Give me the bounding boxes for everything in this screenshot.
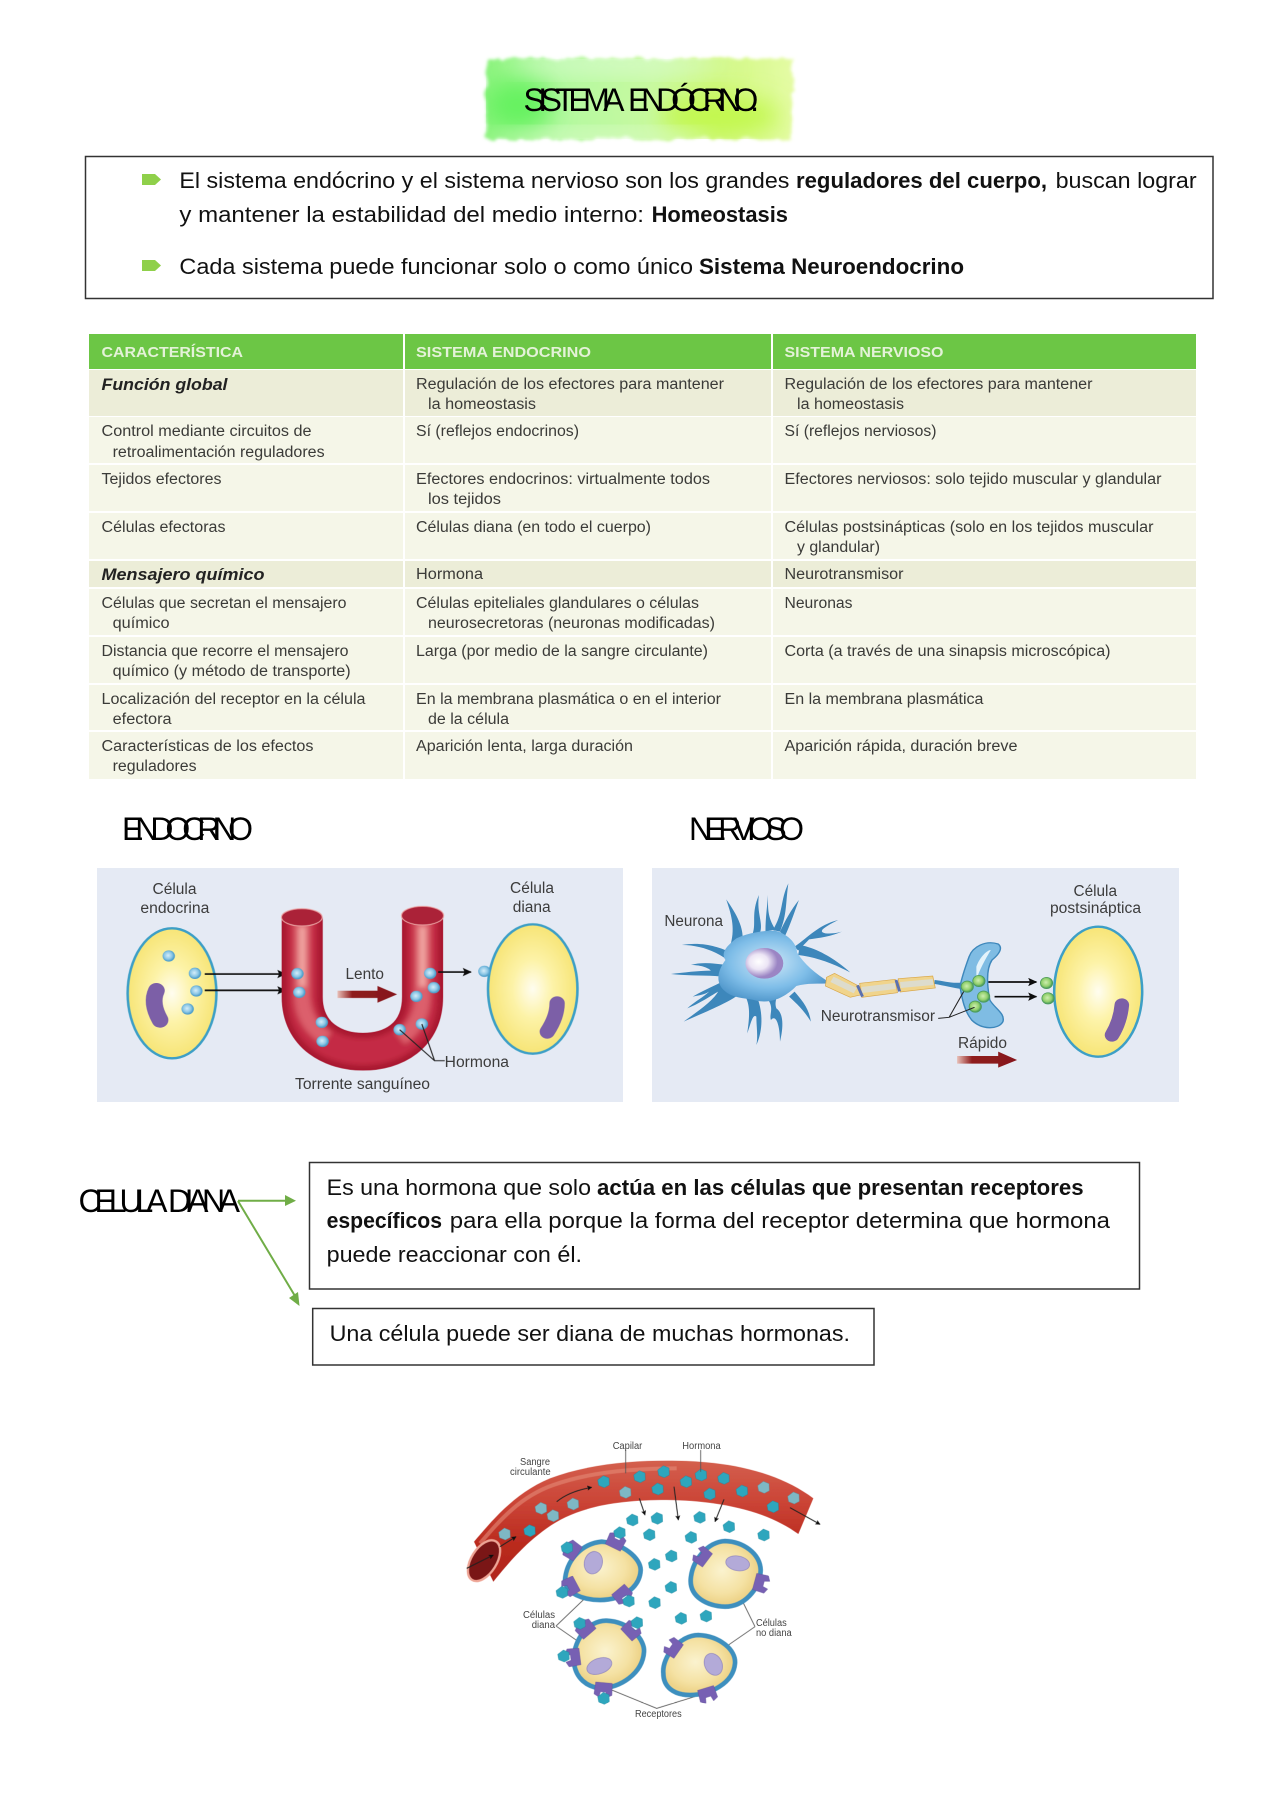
row: función global: [89, 370, 1196, 416]
row: características: Aparición lenta, larga duración: [416, 738, 633, 755]
figure: target cells: [461, 1441, 820, 1720]
row: células efectoras: Células diana (en todo el cuerpo): [416, 519, 651, 536]
endocrine labels: Lento: [346, 966, 384, 983]
capillary: [461, 1461, 813, 1587]
bullet 1: [142, 174, 161, 185]
row: función global: la homeostasis: [797, 396, 904, 413]
non-target cell 1: [690, 1541, 771, 1607]
leader lines: [938, 992, 975, 1018]
row: función global: la homeostasis: [428, 396, 536, 413]
non-target cell 2: [661, 1635, 735, 1705]
row: mensajero químico: Hormona: [416, 566, 483, 583]
row: células que secretan: neurosecretoras (neuronas modificadas): [428, 615, 715, 632]
leader lines: [556, 1450, 755, 1708]
row: función global: Función global: [102, 375, 229, 394]
row: control: Sí (reflejos endocrinos): [416, 423, 579, 440]
nervous labels: postsináptica: [1050, 900, 1141, 917]
arrow to definition box: [238, 1195, 296, 1206]
intro box: [86, 156, 1213, 298]
myelinated axon: [825, 973, 965, 997]
row: células efectoras: y glandular): [797, 539, 880, 556]
bullet 1 text: [179, 168, 1197, 227]
row: control: Sí (reflejos nerviosos): [784, 423, 936, 440]
hormones in capillary: [499, 1466, 799, 1540]
neuron body: [718, 931, 831, 1002]
leader lines to hormona: [400, 1024, 445, 1061]
endocrine labels: Hormona: [445, 1054, 509, 1071]
endocrine labels: Célula: [510, 880, 554, 897]
row: células efectoras: [89, 513, 1196, 559]
row: distancia: Corta (a través de una sinapsis microscópica): [784, 643, 1110, 660]
row: características: [89, 732, 1196, 779]
target cell labels: [510, 1441, 792, 1720]
bullet 1 text: y mantener la estabilidad del medio interno:: [179, 202, 644, 227]
definition box: actúa en las células que presentan receptores: [597, 1175, 1084, 1200]
panel: endocrine diagram: [97, 868, 623, 1102]
panel: nervous diagram: [652, 868, 1179, 1102]
row: células que secretan: Células epiteliales glandulares o células: [416, 595, 699, 612]
note box: Una célula puede ser diana de muchas hormonas.: [330, 1321, 850, 1346]
bullet 2: [142, 260, 161, 271]
fast arrow: [957, 1052, 1017, 1068]
arrows into bloodstream: [205, 974, 285, 990]
postsynaptic cell: [1040, 927, 1142, 1057]
table header row: SISTEMA NERVIOSO: [784, 344, 944, 361]
title text: ENDÓCRINO.: [628, 82, 759, 118]
endocrine drawing: [128, 906, 577, 1061]
row: células que secretan: químico: [113, 615, 170, 632]
nervous labels: Rápido: [958, 1035, 1007, 1052]
row: tejidos efectores: los tejidos: [428, 491, 501, 508]
note box: [313, 1308, 874, 1365]
row: mensajero químico: Neurotransmisor: [784, 566, 904, 583]
definition box: [310, 1162, 1140, 1289]
bullet 1 text: buscan lograr: [1056, 168, 1197, 193]
slow arrow: [337, 986, 397, 1003]
row: distancia: [89, 637, 1196, 683]
row: características: Características de los efectos: [102, 738, 314, 755]
target cell 1: [556, 1527, 641, 1607]
neuron nucleus: [745, 948, 783, 979]
table header row: SISTEMA ENDOCRINO: [416, 344, 591, 361]
blood vessel U: [281, 906, 444, 1052]
bullet 2 text: Cada sistema puede funcionar solo o como único: [179, 254, 693, 279]
row: función global: Regulación de los efectores para mantener: [784, 376, 1092, 393]
bullet 1 text: Homeostasis: [652, 202, 788, 227]
row: localización: [89, 685, 1196, 730]
label: célula diana: DIANA: [168, 1183, 241, 1219]
row: tejidos efectores: Tejidos efectores: [102, 471, 222, 488]
target cell: [478, 924, 577, 1054]
row: distancia: Larga (por medio de la sangre circulante): [416, 643, 708, 660]
label: célula diana: [78, 1183, 241, 1219]
row: control: Control mediante circuitos de: [102, 423, 312, 440]
row: células que secretan: Neuronas: [784, 595, 853, 612]
title text: SISTEMA: [524, 82, 625, 118]
heading: nervioso: NERVIOSO: [689, 811, 804, 847]
target cell labels: Sangre: [520, 1457, 550, 1468]
row: mensajero químico: Mensajero químico: [102, 565, 264, 584]
row: células que secretan: [89, 589, 1196, 635]
hormones in blood: [291, 968, 440, 1047]
definition box: específicos: [327, 1208, 442, 1233]
definition box: para ella porque la forma del receptor determina que hormona: [450, 1208, 1111, 1233]
endocrine cell: [128, 928, 216, 1058]
row: células efectoras: Células postsinápticas (solo en los tejidos muscular: [784, 519, 1154, 536]
row: localización: En la membrana plasmática: [784, 691, 984, 708]
row: células que secretan: Células que secretan el mensajero: [102, 595, 346, 612]
row: características: Aparición rápida, duración breve: [784, 738, 1018, 755]
nervous drawing: [671, 883, 1142, 1068]
flow arrows: [467, 1487, 820, 1568]
endocrine labels: [140, 880, 554, 1093]
target cell labels: Células: [756, 1618, 787, 1629]
title banner: [484, 56, 792, 144]
axon terminal: [960, 943, 1003, 1028]
bullet 2 text: Sistema Neuroendocrino: [699, 254, 964, 279]
row: células efectoras: Células efectoras: [102, 519, 226, 536]
label: célula diana: CELULA: [78, 1183, 168, 1219]
endocrine labels: diana: [513, 899, 551, 916]
arrow to note box: [238, 1201, 300, 1306]
target cell labels: no diana: [756, 1628, 792, 1639]
row: tejidos efectores: Efectores nerviosos: solo tejido muscular y glandular: [784, 471, 1162, 488]
nervous labels: Célula: [1074, 883, 1117, 900]
row: control: retroalimentación reguladores: [113, 444, 325, 461]
target cell labels: Receptores: [635, 1709, 682, 1720]
row: distancia: Distancia que recorre el mensajero: [102, 643, 348, 660]
row: distancia: químico (y método de transporte): [113, 663, 351, 680]
nervous labels: [664, 883, 1141, 1052]
arrow to target: [438, 969, 471, 974]
endocrine labels: Célula: [152, 881, 197, 898]
comparison table: [89, 334, 1196, 779]
target cell labels: Capilar: [613, 1441, 643, 1452]
target cell labels: Hormona: [682, 1441, 721, 1452]
release arrows: [988, 982, 1036, 997]
row: características: reguladores: [113, 758, 197, 775]
bullet 1 text: El sistema endócrino y el sistema nervioso son los grandes: [179, 168, 789, 193]
target cell drawing: [461, 1450, 820, 1708]
row: mensajero químico: [89, 561, 1196, 587]
row: localización: Localización del receptor en la célula: [102, 691, 366, 708]
nervous labels: Neurona: [664, 913, 723, 930]
target cell labels: Células: [523, 1610, 555, 1621]
row: tejidos efectores: [89, 465, 1196, 511]
target cell labels: circulante: [510, 1467, 551, 1478]
definition box: Es una hormona que solo: [327, 1175, 591, 1200]
row: localización: de la célula: [428, 711, 509, 728]
row: función global: Regulación de los efectores para mantener: [416, 376, 724, 393]
target cell labels: diana: [532, 1620, 555, 1631]
endocrine labels: Torrente sanguíneo: [295, 1076, 430, 1093]
free hormones: [626, 1511, 769, 1624]
title watercolor background: [484, 56, 792, 144]
row: control: [89, 417, 1196, 463]
endocrine labels: endocrina: [140, 900, 210, 917]
title text: [524, 82, 759, 118]
terminal highlight: [976, 950, 991, 980]
bullet 2 text: [179, 254, 964, 279]
row: localización: En la membrana plasmática o en el interior: [416, 691, 721, 708]
neuron dendrites: [671, 883, 850, 1045]
row: localización: efectora: [113, 711, 172, 728]
nervous labels: Neurotransmisor: [821, 1008, 935, 1025]
definition box: puede reaccionar con él.: [327, 1242, 582, 1267]
row: tejidos efectores: Efectores endocrinos: virtualmente todos: [416, 471, 710, 488]
table header row: [89, 334, 1196, 369]
table header row: CARACTERÍSTICA: [102, 344, 243, 361]
neurotransmitter vesicles: [961, 975, 990, 1012]
bullet 1 text: reguladores del cuerpo,: [796, 168, 1047, 193]
target cell 2: [558, 1617, 644, 1704]
heading: endocrino: ENDOCRINO: [122, 811, 253, 847]
